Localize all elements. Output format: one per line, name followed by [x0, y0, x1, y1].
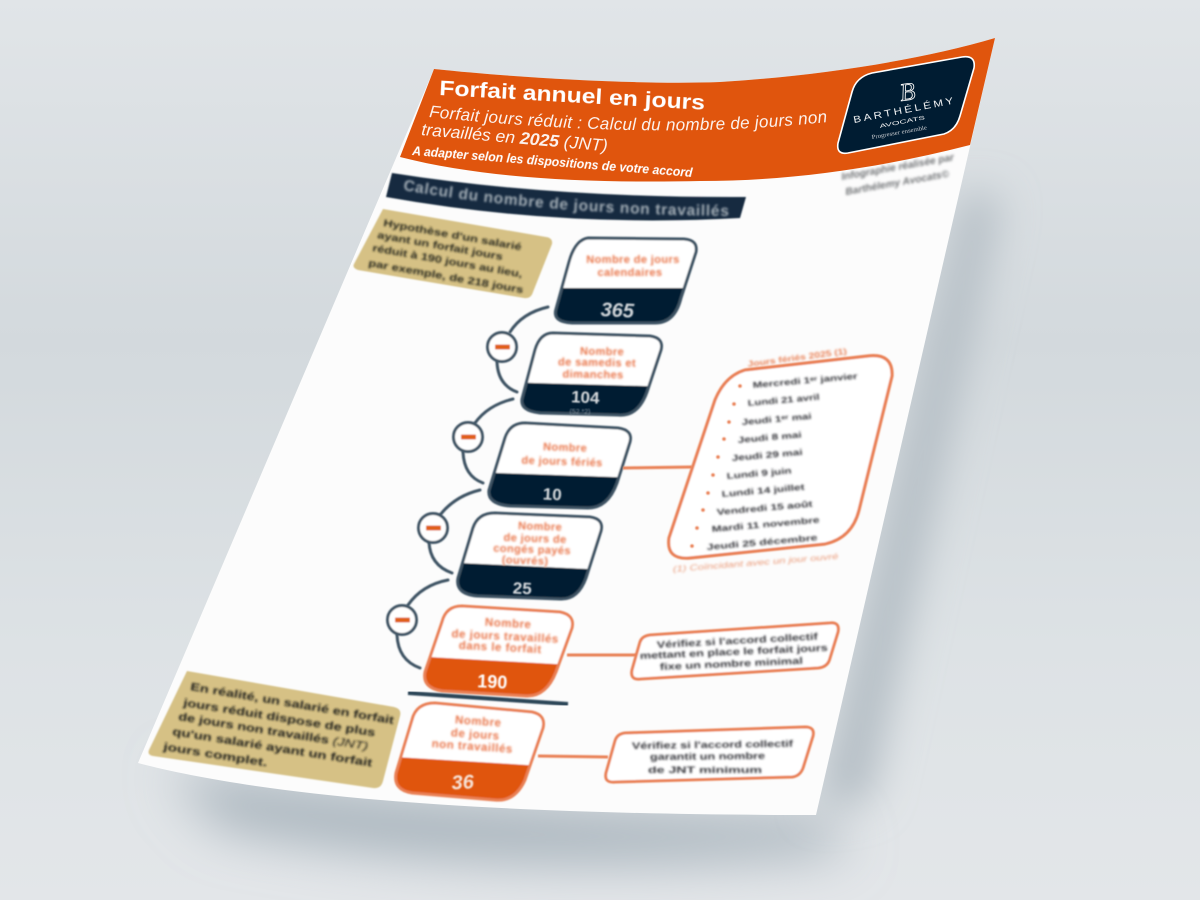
- card: public holidays: 10: [542, 485, 562, 504]
- title: Forfait annuel en jours: [439, 76, 706, 115]
- card: paid leave: [455, 510, 604, 602]
- card: calendar days: Nombre de jours: [586, 254, 680, 266]
- callout: hypothesis: par exemple, de 218 jours: [367, 258, 525, 296]
- subtitle: Forfait jours réduit : Calcul du nombre de jours non: [429, 106, 826, 132]
- card: calendar days: 365: [600, 299, 635, 323]
- callout: minimum days: mettant en place le forfait jours: [640, 643, 828, 662]
- card: public holidays: Nombre: [543, 441, 587, 455]
- callout: minimum JNT: garantit un nombre: [650, 751, 765, 763]
- card: calendar days: calendaires: [598, 267, 662, 279]
- credit: Barthélemy Avocats©: [845, 169, 951, 198]
- card: non-worked days: de jours: [450, 727, 500, 743]
- logo: Progresser ensemble: [871, 125, 928, 141]
- credit: Infographie réalisée par: [841, 152, 956, 183]
- card: paid leave: 25: [512, 579, 532, 598]
- connectors: [397, 307, 548, 668]
- card: paid leave: de jours de: [503, 532, 567, 546]
- paper shadow: [170, 190, 1000, 861]
- callout: hypothesis: [354, 209, 552, 298]
- callout: reality: En réalité, un salarié en forfait: [190, 681, 395, 727]
- card: days worked in forfait: 190: [477, 671, 508, 693]
- panel: public holidays list: Jeudi 25 décembre: [706, 532, 818, 552]
- card: saturdays and sundays: de samedis et: [558, 356, 636, 370]
- callout: reality: qu'un salarié ayant un forfait: [172, 726, 373, 770]
- card: non-worked days: 36: [451, 771, 475, 795]
- logo: [838, 57, 974, 153]
- card: calendar days: [552, 235, 699, 326]
- callout: minimum days: Vérifiez si l'accord collectif: [657, 632, 819, 651]
- callout: hypothesis: réduit à 190 jours au lieu,: [371, 243, 523, 280]
- card: saturdays and sundays: (52 *2): [569, 409, 591, 416]
- card: paid leave: congés payés: [493, 543, 571, 557]
- card: non-worked days: Nombre: [455, 714, 502, 730]
- card: days worked in forfait: dans le forfait: [458, 640, 542, 656]
- card: saturdays and sundays: Nombre: [580, 346, 624, 358]
- panel: public holidays list: Mercredi 1ᵉʳ janvier: [752, 371, 859, 390]
- card: saturdays and sundays: 104: [571, 387, 600, 408]
- callout: minimum days: fixe un nombre minimal: [660, 656, 803, 673]
- panel: public holidays list: Mardi 11 novembre: [711, 515, 820, 534]
- card: saturdays and sundays: dimanches: [562, 368, 624, 382]
- card: public holidays: [486, 420, 634, 511]
- card: days worked in forfait: [422, 604, 575, 698]
- callout: reality: de jours non travaillés (JNT): [178, 711, 369, 753]
- card: non-worked days: non travaillés: [431, 738, 513, 756]
- card: non-worked days: [393, 700, 546, 803]
- logo: AVOCATS: [879, 115, 926, 130]
- callout: reality: jours réduit dispose de plus: [181, 697, 376, 739]
- subtitle: travaillés en 2025 (JNT): [421, 120, 609, 155]
- panel: public holidays list: [669, 346, 892, 574]
- connector lines: [538, 467, 692, 757]
- callout: hypothesis: Hypothèse d'un salarié: [382, 218, 523, 253]
- card: paid leave: Nombre: [518, 520, 562, 534]
- logo: BARTHÉLÉMY: [852, 95, 957, 126]
- panel: public holidays list: Vendredi 15 août: [716, 499, 813, 517]
- callout: reality: jours complet.: [161, 741, 268, 769]
- card: saturdays and sundays: [519, 330, 664, 418]
- callout: minimum JNT: Vérifiez si l'accord collectif: [632, 739, 794, 752]
- callout: reality: [148, 671, 400, 788]
- callout: minimum JNT: de JNT minimum: [648, 765, 762, 776]
- card: public holidays: de jours fériés: [521, 455, 603, 469]
- callout: minimum JNT: [606, 727, 813, 782]
- panel: public holidays list: Jeudi 1ᵉʳ mai: [741, 411, 812, 427]
- panel: public holidays list: Lundi 9 juin: [726, 465, 792, 481]
- panel: public holidays list: Jeudi 8 mai: [737, 429, 802, 445]
- credit: [841, 152, 956, 198]
- callout: minimum days: [632, 623, 838, 679]
- equals line: [408, 693, 568, 704]
- panel: public holidays list: Jeudi 29 mai: [731, 447, 803, 463]
- card: days worked in forfait: de jours travaillés: [451, 628, 559, 646]
- callout: hypothesis: ayant un forfait jours: [376, 230, 504, 263]
- minus circles: [388, 332, 516, 634]
- section heading: Calcul du nombre de jours non travaillés: [402, 178, 730, 218]
- card: paid leave: (ouvrés): [502, 554, 549, 568]
- panel: public holidays list: (1) Coïncidant avec un jour ouvré: [672, 552, 839, 574]
- paper sheet: [138, 38, 995, 815]
- panel: public holidays list: Lundi 14 juillet: [721, 482, 805, 499]
- card: days worked in forfait: Nombre: [485, 617, 532, 631]
- header band: [400, 38, 995, 182]
- panel: public holidays list: Jours fériés 2025 (1): [747, 346, 848, 369]
- subtitle: [421, 106, 826, 155]
- adapt note: A adapter selon les dispositions de votre accord: [411, 144, 693, 180]
- panel: public holidays list: Lundi 21 avril: [747, 392, 820, 408]
- logo: B: [898, 78, 917, 107]
